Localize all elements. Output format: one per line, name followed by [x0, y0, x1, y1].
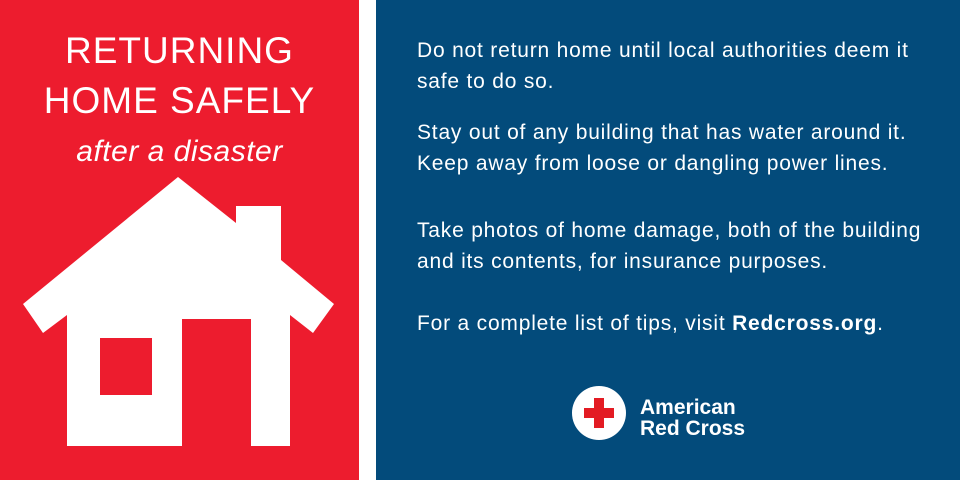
icon: house	[23, 177, 334, 446]
panel: right blue	[376, 0, 960, 480]
text block: tips: safe to do so.	[417, 70, 554, 93]
title: HOME SAFELY	[44, 80, 315, 121]
text block: tips	[417, 39, 921, 335]
title: RETURNING	[65, 30, 294, 71]
panel: left red	[0, 0, 359, 480]
text block: tips: Take photos of home damage, both of the building	[417, 219, 921, 242]
text block: tips: Keep away from loose or dangling power lines.	[417, 152, 888, 175]
title	[44, 30, 315, 121]
logo text: American	[640, 396, 736, 419]
text block: tips: and its contents, for insurance purposes.	[417, 250, 828, 273]
logo: American Red Cross	[572, 386, 745, 440]
logo text	[640, 396, 745, 440]
text block: tips: Stay out of any building that has water around it.	[417, 121, 906, 144]
text block: tips: Do not return home until local authorities deem it	[417, 39, 909, 62]
logo text: Red Cross	[640, 417, 745, 440]
subtitle: after a disaster	[76, 135, 283, 168]
text block: tips: For a complete list of tips, visit Redcross.org.	[417, 312, 884, 335]
icon: red cross circle	[572, 386, 626, 440]
